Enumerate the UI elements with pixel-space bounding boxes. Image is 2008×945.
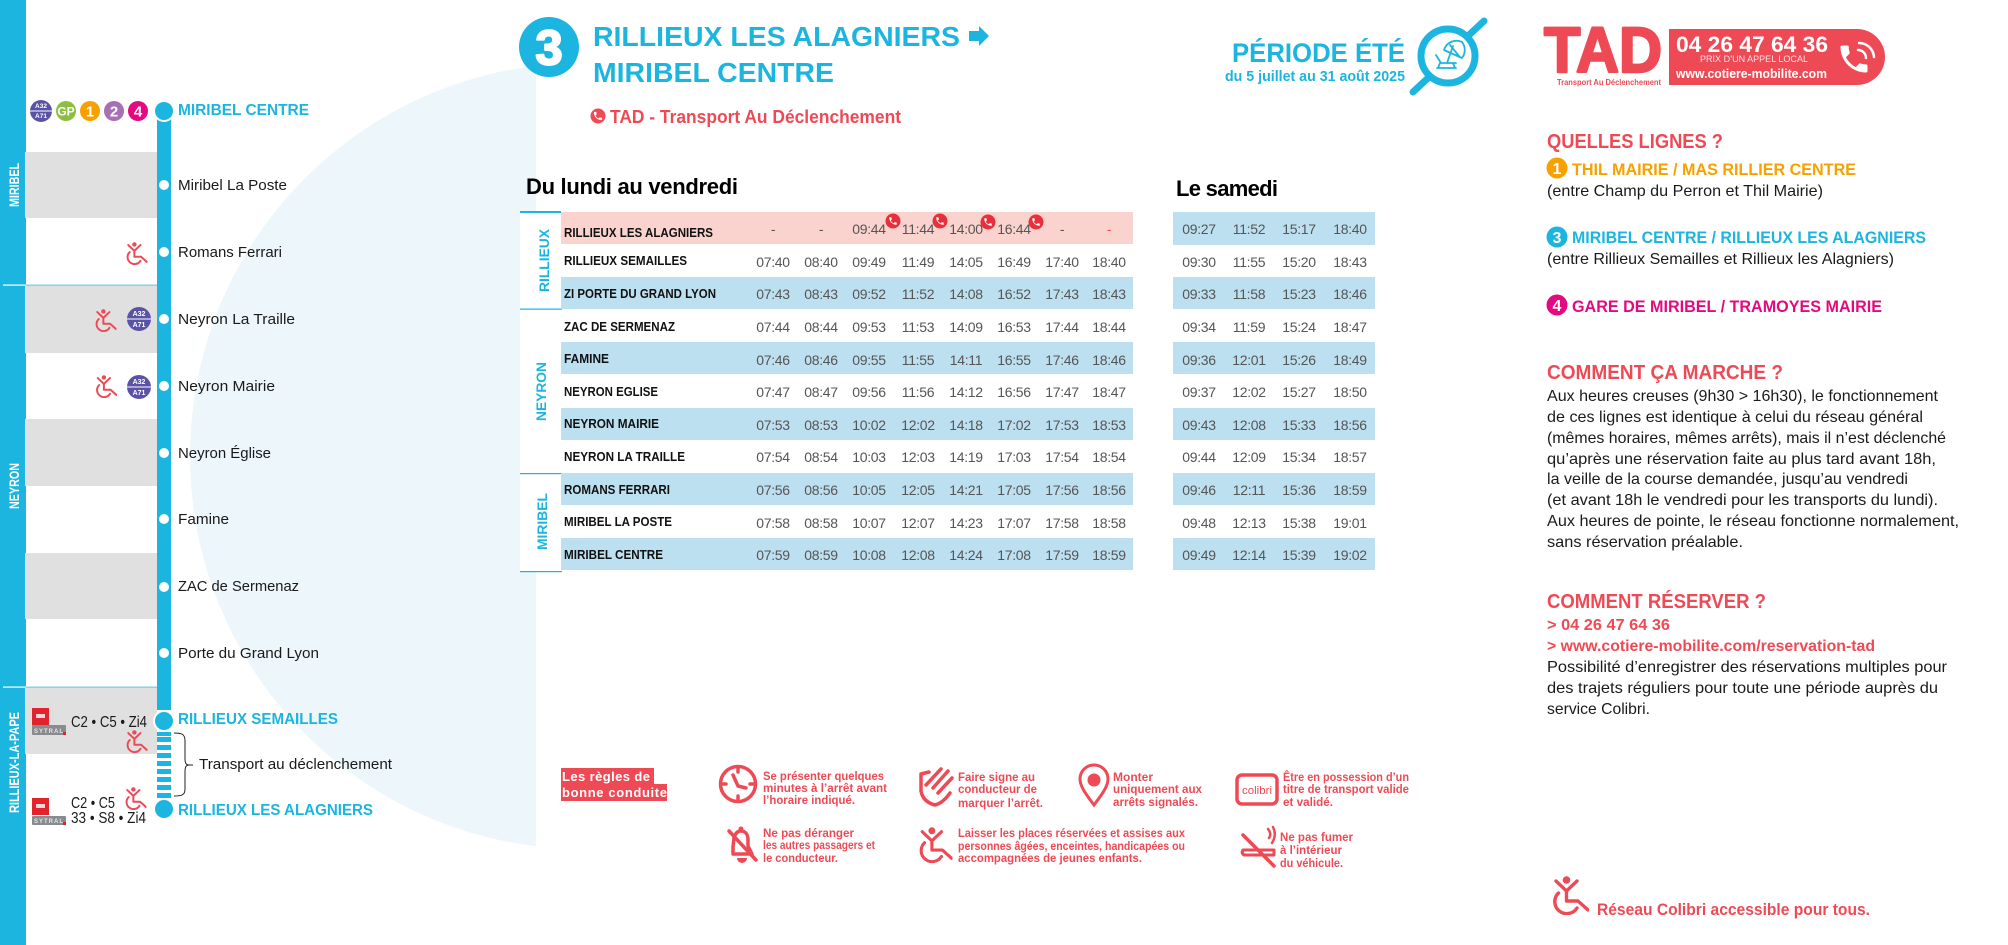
row: Neyron Mairie: 12:02 [901,417,935,433]
saturday times: 09:48 [1182,515,1216,531]
body text: la veille de la course demandée, jusqu’au vendredi [1547,471,1908,488]
row: Neyron La Traille: 07:54 [756,449,790,465]
row: ZAC de Sermenaz: 16:53 [997,319,1031,335]
row: Rillieux Semailles: 17:40 [1045,254,1079,270]
rule: priority seats: Laisser les places réservées et assises aux [958,826,1185,840]
rule: signal the driver [921,769,1043,810]
saturday times: 15:17 [1282,221,1316,237]
rule: board at signed stops: arrêts signalés. [1113,795,1198,809]
rule: board at signed stops: uniquement aux [1113,782,1202,796]
icons: accessibility at stops [97,242,147,809]
row: Miribel Centre: 10:08 [852,547,886,563]
rule: priority seats: personnes âgées, enceintes, handicapées ou [958,839,1185,853]
saturday times: 15:34 [1282,449,1316,465]
row: Romans Ferrari: 12:05 [901,482,935,498]
stop labels: RILLIEUX LES ALAGNIERS [178,802,373,819]
icons: phone on demand markers [886,214,1044,230]
heading: les regles de bonne conduite: bonne conduite [562,785,667,800]
row: Neyron Eglise: 08:47 [804,384,838,400]
line 1: (entre Champ du Perron et Thil Mairie) [1547,183,1823,200]
row: Rillieux Semailles: 14:05 [949,254,983,270]
rule: arrive early: Se présenter quelques [763,769,884,783]
row: Rillieux Semailles: RILLIEUX SEMAILLES [564,253,687,268]
row: Romans Ferrari: 10:05 [852,482,886,498]
logo: Sytral Rillieux Semailles [32,708,66,735]
saturday times: 09:34 [1182,319,1216,335]
background pale circle [190,67,536,846]
rule: signal the driver: marquer l’arrêt. [958,796,1043,810]
row: Romans Ferrari: 18:56 [1092,482,1126,498]
row: Miribel La Poste [564,514,1126,531]
row: Miribel Centre: 17:59 [1045,547,1079,563]
row: Rillieux les Alagniers: - [1060,221,1065,237]
rule: no smoking: du véhicule. [1280,856,1343,870]
row: Neyron Mairie: 17:02 [997,417,1031,433]
saturday times: 11:55 [1233,254,1266,270]
row: Neyron Eglise: 17:47 [1045,384,1079,400]
line 3 [1546,226,1926,268]
panel: timetable monday to friday [520,174,1133,572]
line 3: MIRIBEL CENTRE / RILLIEUX LES ALAGNIERS [1572,228,1926,247]
saturday times: 15:27 [1282,384,1316,400]
stop labels: Porte du Grand Lyon [178,645,319,662]
saturday times [1182,221,1367,563]
saturday times: 09:36 [1182,352,1216,368]
heading: Le samedi [1176,176,1278,201]
saturday times: 11:59 [1233,319,1266,335]
connection badges: Miribel Centre: A32 [35,103,47,110]
logo: TAD: TAD [1544,14,1662,86]
stop labels: Miribel La Poste [178,177,287,194]
saturday times: 12:11 [1233,482,1266,498]
rule: do not disturb: les autres passagers et [763,838,875,852]
row: Neyron La Traille: 14:19 [949,449,983,465]
row: Miribel Centre [564,547,1126,563]
saturday times: 12:01 [1232,352,1266,368]
heading: les regles de bonne conduite: Les règles de [562,769,650,784]
row bands [1173,212,1375,570]
row: ZAC de Sermenaz: 18:44 [1092,319,1126,335]
row: ZAC de Sermenaz [564,319,1126,335]
line 4: 4 [1553,298,1562,315]
saturday times: 12:08 [1232,417,1266,433]
row: ZAC de Sermenaz: 11:53 [902,319,935,335]
row: ZI Porte du Grand Lyon: 11:52 [902,286,935,302]
row: Neyron Eglise: 14:12 [949,384,983,400]
row: ZI Porte du Grand Lyon [564,286,1126,302]
section labels: NEYRON [533,362,549,421]
row: Miribel La Poste: 08:58 [804,515,838,531]
rule: valid ticket: titre de transport valide [1283,782,1409,796]
row: Rillieux Semailles: 18:40 [1092,254,1126,270]
callout: TAD phone pill [1669,29,1885,85]
row: Famine: 08:46 [804,352,838,368]
panel: timetable saturday [1173,176,1375,570]
row: ZI Porte du Grand Lyon: 09:52 [852,286,886,302]
line 3: (entre Rillieux Semailles et Rillieux les Alagniers) [1547,251,1894,268]
row: Neyron Mairie [564,416,1126,433]
logo: TAD: Transport Au Déclenchement [1557,78,1661,87]
rule: no smoking: à l’intérieur [1280,843,1342,857]
saturday times: 09:49 [1182,547,1216,563]
row: Neyron La Traille: 17:03 [997,449,1031,465]
brace: transport au declenchement [174,733,393,796]
period: ete [1225,21,1484,92]
row: Romans Ferrari: 07:56 [756,482,790,498]
row: ZAC de Sermenaz: 07:44 [756,319,790,335]
period: ete: du 5 juillet au 31 août 2025 [1225,68,1405,85]
row: Romans Ferrari: ROMANS FERRARI [564,482,670,497]
saturday times: 19:02 [1333,547,1367,563]
row: Neyron Eglise: 18:47 [1092,384,1126,400]
body text: de ces lignes est identique à celui du réseau général [1547,409,1923,426]
row: Famine: 17:46 [1045,352,1079,368]
saturday times: 15:20 [1282,254,1316,270]
row: Neyron Mairie: 14:18 [949,417,983,433]
body text: sans réservation préalable. [1547,534,1743,551]
rule: board at signed stops [1080,765,1202,809]
row: Famine: 09:55 [852,352,886,368]
row: Miribel La Poste: 17:07 [997,515,1031,531]
body text: (et avant 18h le vendredi pour les transports du lundi). [1547,492,1938,509]
row bands [561,212,1133,570]
saturday times: 12:09 [1232,449,1266,465]
line 4: GARE DE MIRIBEL / TRAMOYES MAIRIE [1572,297,1882,316]
title [593,21,989,88]
saturday times: 18:56 [1333,417,1367,433]
row: Rillieux les Alagniers: 11:44 [902,221,935,237]
brace: transport au declenchement: Transport au déclenchement [199,756,393,773]
section labels [520,211,562,572]
row: Rillieux les Alagniers: 09:44 [852,221,886,237]
line 1: 1 [1553,161,1562,178]
row: Neyron Mairie: 17:53 [1045,417,1079,433]
saturday times: 12:14 [1232,547,1266,563]
saturday times: 18:46 [1333,286,1367,302]
body text [1547,388,1959,551]
header: line number and title [519,17,989,127]
row: Neyron Mairie: 18:53 [1092,417,1126,433]
callout: TAD phone pill: PRIX D’UN APPEL LOCAL [1700,54,1808,64]
rule: priority seats [921,826,1185,865]
saturday times: 09:33 [1182,286,1216,302]
connection badges: Miribel Centre: GP [57,104,75,118]
title: RILLIEUX LES ALAGNIERS [593,21,960,52]
badge: A32 A71 Neyron La Traille: A71 [133,322,146,329]
rule: no smoking [1242,827,1353,870]
logo: Sytral Rillieux les Alagniers: SYTRAL [34,819,64,825]
row: Miribel Centre: 08:59 [804,547,838,563]
row: Famine: 07:46 [756,352,790,368]
saturday times: 11:52 [1233,221,1266,237]
row: Miribel La Poste: 12:07 [901,515,935,531]
commune bar [0,0,26,945]
saturday times: 11:58 [1233,286,1266,302]
heading: les regles de bonne conduite [561,768,667,801]
rule: signal the driver: Faire signe au [958,770,1035,784]
callout: TAD phone pill: 04 26 47 64 36 [1676,32,1828,57]
title: MIRIBEL CENTRE [593,57,834,88]
saturday times: 15:33 [1282,417,1316,433]
stop labels: Romans Ferrari [178,244,282,261]
rule: valid ticket: Être en possession d’un [1283,769,1409,784]
connection badges: Miribel Centre [30,100,148,122]
row: Famine: 16:55 [997,352,1031,368]
row: Miribel La Poste: 18:58 [1092,515,1126,531]
icon: phone [1840,43,1874,72]
row: Famine: 11:55 [902,352,935,368]
row: Neyron La Traille: 08:54 [804,449,838,465]
rule: arrive early: l’horaire indiqué. [763,793,855,807]
row: Neyron La Traille: 18:54 [1092,449,1126,465]
panel: comment ca marche: COMMENT ÇA MARCHE ? [1547,362,1783,384]
row: Romans Ferrari: 17:05 [997,482,1031,498]
row: Neyron Mairie: NEYRON MAIRIE [564,416,659,431]
rule: valid ticket: colibri [1242,785,1272,797]
row: ZI Porte du Grand Lyon: 14:08 [949,286,983,302]
connections: Rillieux les Alagniers: C2 • C5 [71,795,115,812]
row: Rillieux Semailles: 16:49 [997,254,1031,270]
row: ZI Porte du Grand Lyon: 08:43 [804,286,838,302]
rule: arrive early [720,766,887,807]
row: ZI Porte du Grand Lyon: 07:43 [756,286,790,302]
saturday times: 12:13 [1232,515,1266,531]
rule: do not disturb: Ne pas déranger [763,826,854,840]
row: Miribel La Poste: 17:58 [1045,515,1079,531]
row: Neyron Eglise [564,384,1126,400]
body text: des trajets réguliers pour toute une période auprès du [1547,680,1938,697]
saturday times: 15:38 [1282,515,1316,531]
logo: Sytral Rillieux Semailles: SYTRAL [34,729,64,735]
stop labels: RILLIEUX SEMAILLES [178,711,338,728]
heading: Du lundi au vendredi [526,174,738,199]
body text: Aux heures de pointe, le réseau fonctionne normalement, [1547,513,1959,530]
commune bar: MIRIBEL [7,163,22,207]
connections: Rillieux Semailles: C2 • C5 • Zi4 [71,714,147,731]
saturday times: 19:01 [1333,515,1367,531]
row: ZI Porte du Grand Lyon: 17:43 [1045,286,1079,302]
section labels: MIRIBEL [534,493,550,550]
saturday times: 09:46 [1182,482,1216,498]
row: Miribel Centre: MIRIBEL CENTRE [564,547,663,562]
saturday times: 15:23 [1282,286,1316,302]
row: Rillieux Semailles: 09:49 [852,254,886,270]
connection badges: Miribel Centre: A71 [35,113,47,120]
rule: do not disturb: le conducteur. [763,851,838,865]
row: Romans Ferrari: 14:21 [949,482,983,498]
panel: comment reserver: > www.cotiere-mobilite.com/reservation-tad [1547,638,1875,655]
stop labels: MIRIBEL CENTRE [178,102,309,119]
badge: A32 A71 Neyron Mairie [127,375,151,399]
logo: Sytral Rillieux les Alagniers [32,798,66,825]
saturday times: 18:40 [1333,221,1367,237]
row: Romans Ferrari [564,482,1126,498]
rule: board at signed stops: Monter [1113,770,1153,784]
stop labels [178,102,373,819]
row: Neyron Eglise: 09:56 [852,384,886,400]
saturday times: 09:27 [1182,221,1216,237]
icon: line 3 badge: 3 [535,22,563,76]
row: Miribel Centre: 17:08 [997,547,1031,563]
row: Neyron La Traille: 10:03 [852,449,886,465]
rule: valid ticket: et validé. [1283,795,1333,809]
rule: valid ticket [1237,769,1409,809]
row: Rillieux Semailles [564,253,1126,270]
row: Rillieux les Alagniers: - [819,221,824,237]
panel: comment reserver: COMMENT RÉSERVER ? [1547,590,1766,613]
connections: Rillieux les Alagniers [71,795,146,827]
row: Rillieux Semailles: 11:49 [902,254,935,270]
saturday times: 09:30 [1182,254,1216,270]
row: ZI Porte du Grand Lyon: ZI PORTE DU GRAND LYON [564,286,716,301]
rule: priority seats: accompagnées de jeunes enfants. [958,851,1142,865]
body text: qu’après une réservation faite au plus tard avant 18h, [1547,451,1936,468]
row: ZAC de Sermenaz: 09:53 [852,319,886,335]
panel: comment ca marche [1547,362,1959,551]
row: Miribel Centre: 07:59 [756,547,790,563]
row: Miribel La Poste: MIRIBEL LA POSTE [564,514,672,529]
body text: service Colibri. [1547,701,1650,718]
stop labels: Neyron Église [178,445,271,462]
row: Romans Ferrari: 17:56 [1045,482,1079,498]
saturday times: 18:49 [1333,352,1367,368]
panel: rules of conduct [561,765,1409,870]
row: Romans Ferrari: 08:56 [804,482,838,498]
stop labels: Neyron Mairie [178,378,275,395]
stops [154,101,174,819]
row: Rillieux les Alagniers: - [1107,221,1112,237]
saturday times: 12:02 [1232,384,1266,400]
saturday times: 15:26 [1282,352,1316,368]
row: Neyron Mairie: 07:53 [756,417,790,433]
row: Miribel La Poste: 07:58 [756,515,790,531]
line 1 [1546,158,1856,200]
row: Famine: 18:46 [1092,352,1126,368]
row: Rillieux Semailles: 08:40 [804,254,838,270]
saturday times: 09:43 [1182,417,1216,433]
row: ZAC de Sermenaz: ZAC DE SERMENAZ [564,319,675,334]
saturday times: 18:47 [1333,319,1367,335]
row: Rillieux les Alagniers: 16:44 [997,221,1031,237]
body text: (mêmes horaires, mêmes arrêts), mais il n’est déclenché [1547,430,1946,447]
callout: accessibility [1555,876,1870,919]
stop labels: ZAC de Sermenaz [178,578,299,595]
grey bands [25,152,157,754]
body text: Possibilité d’enregistrer des réservations multiples pour [1547,659,1948,676]
row: Famine: 14:11 [950,352,983,368]
row: ZI Porte du Grand Lyon: 16:52 [997,286,1031,302]
line 1: THIL MAIRIE / MAS RILLIER CENTRE [1572,160,1856,179]
row: Neyron Eglise: 16:56 [997,384,1031,400]
row: Famine [564,351,1126,368]
rule: no smoking: Ne pas fumer [1280,830,1353,844]
row: Neyron La Traille: 12:03 [901,449,935,465]
commune bar: NEYRON [7,463,22,509]
row: Miribel Centre: 12:08 [901,547,935,563]
row: Miribel La Poste: 10:07 [852,515,886,531]
saturday times: 18:59 [1333,482,1367,498]
connection badges: Miribel Centre: 2 [110,104,118,120]
panel: line diagram [0,0,393,945]
badge: A32 A71 Neyron Mairie: A71 [133,390,146,397]
saturday times: 18:43 [1333,254,1367,270]
row: ZAC de Sermenaz: 14:09 [949,319,983,335]
row: Miribel Centre: 18:59 [1092,547,1126,563]
saturday times: 18:57 [1333,449,1367,465]
row: Neyron Eglise: 07:47 [756,384,790,400]
row: Miribel La Poste: 14:23 [949,515,983,531]
saturday times: 09:44 [1182,449,1216,465]
panel: quelles lignes: QUELLES LIGNES ? [1547,131,1723,153]
route line [157,110,171,798]
row: Miribel Centre: 14:24 [949,547,983,563]
row: Rillieux Semailles: 07:40 [756,254,790,270]
body text [1547,659,1948,718]
rule: signal the driver: conducteur de [958,782,1037,796]
connection badges: Miribel Centre: 1 [86,104,94,120]
badge: A32 A71 Neyron Mairie: A32 [133,379,146,386]
subtitle TAD: TAD - Transport Au Déclenchement [610,107,901,127]
icon: line 3 badge [519,17,579,77]
row: Rillieux les Alagniers: RILLIEUX LES ALAGNIERS [564,225,713,240]
icon: beach ring [1413,21,1484,92]
connections: Rillieux les Alagniers: 33 • S8 • Zi4 [71,810,146,827]
row: Rillieux les Alagniers: - [771,221,776,237]
callout: accessibility: Réseau Colibri accessible pour tous. [1597,901,1870,919]
badge: A32 A71 Neyron La Traille: A32 [133,311,146,318]
panel: quelles lignes [1546,131,1926,316]
panel: comment reserver [1547,590,1948,718]
stop labels: Famine [178,511,229,528]
row: Neyron Mairie: 08:53 [804,417,838,433]
rule: do not disturb [729,826,875,865]
row: Famine: FAMINE [564,351,609,366]
body text: Aux heures creuses (9h30 > 16h30), le fonctionnement [1547,388,1939,405]
line 3: 3 [1553,230,1562,247]
saturday times: 09:37 [1182,384,1216,400]
commune bar: RILLIEUX-LA-PAPE [7,712,22,813]
period: ete: PÉRIODE ÉTÉ [1232,37,1405,68]
row: Neyron Mairie: 10:02 [852,417,886,433]
saturday times: 15:24 [1282,319,1316,335]
saturday times: 18:50 [1333,384,1367,400]
row: Neyron Eglise: NEYRON EGLISE [564,384,658,399]
row: ZAC de Sermenaz: 08:44 [804,319,838,335]
row: Neyron Eglise: 11:56 [902,384,935,400]
saturday times: 15:36 [1282,482,1316,498]
saturday times: 15:39 [1282,547,1316,563]
stop labels: Neyron La Traille [178,311,295,328]
row: Neyron La Traille: 17:54 [1045,449,1079,465]
row: Rillieux les Alagniers [564,221,1112,240]
panel: comment reserver: > 04 26 47 64 36 [1547,617,1670,634]
row: Rillieux les Alagniers: 14:00 [949,221,983,237]
row: ZAC de Sermenaz: 17:44 [1045,319,1079,335]
callout: TAD phone pill: www.cotiere-mobilite.com [1675,66,1827,81]
section labels: RILLIEUX [536,228,552,292]
connection badges: Miribel Centre: 4 [134,104,143,120]
row: ZI Porte du Grand Lyon: 18:43 [1092,286,1126,302]
badge: A32 A71 Neyron La Traille [127,307,151,331]
rule: arrive early: minutes à l’arrêt avant [763,781,887,795]
row: Neyron La Traille: NEYRON LA TRAILLE [564,449,685,464]
row: Neyron La Traille [564,449,1126,465]
